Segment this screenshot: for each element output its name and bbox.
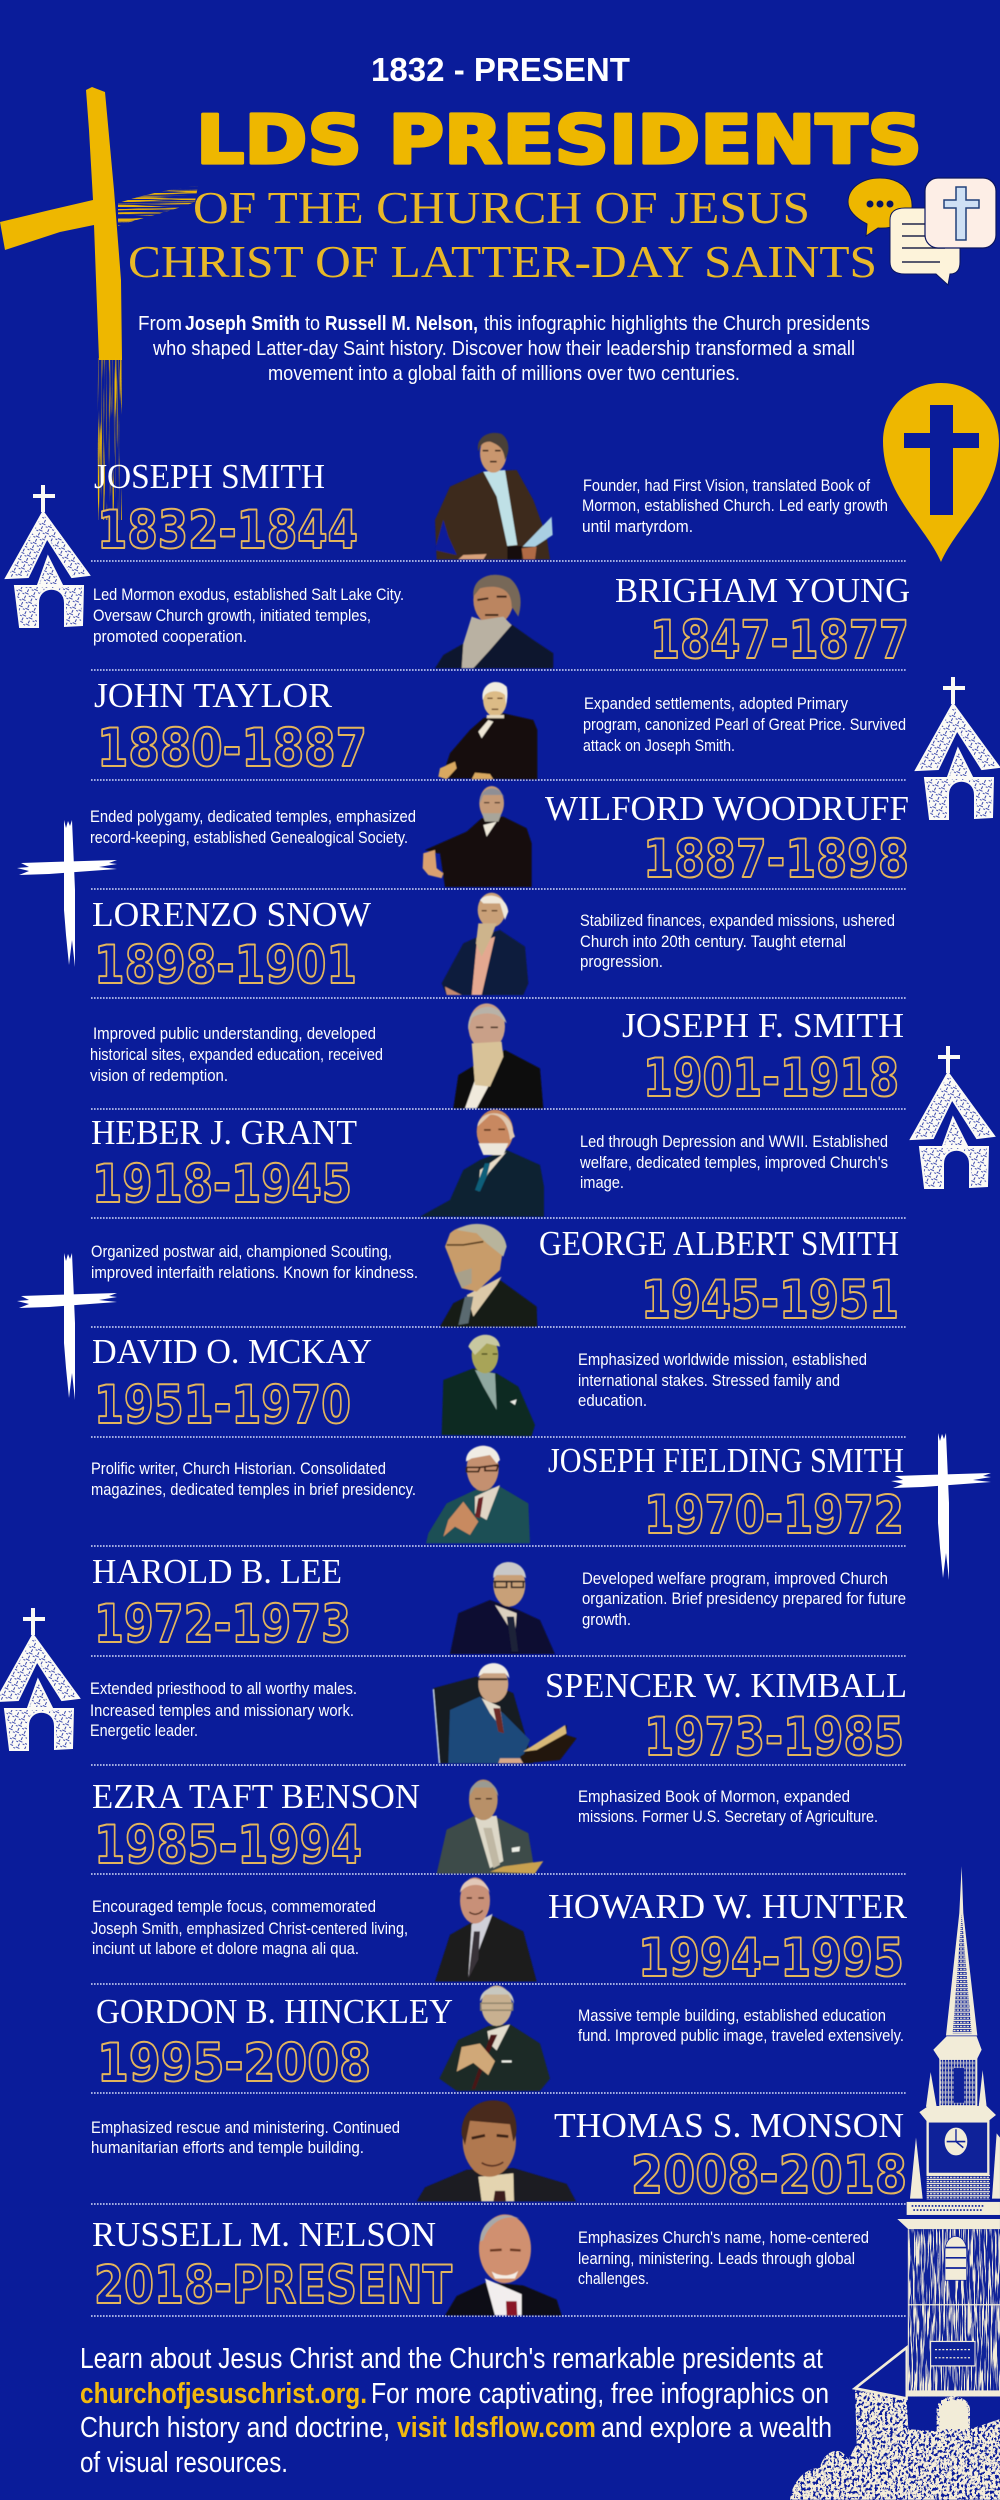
description: vision of redemption. [90,1066,228,1085]
name: HOWARD W. HUNTER [548,1887,908,1926]
intro text: movement into a global faith of millions over two centuries. [268,363,740,385]
description: Extended priesthood to all worthy males. [90,1679,357,1698]
dates: 1901-1918 [643,1048,899,1109]
footer call to action: Church history and doctrine, [80,2412,390,2444]
portrait [453,1003,543,1108]
description [578,2228,869,2288]
icon: church right 1 [916,677,999,819]
description: growth. [582,1610,631,1629]
description [578,1350,867,1410]
description: Led through Depression and WWII. Established [580,1132,888,1151]
row: Lorenzo Snow [92,893,895,996]
portrait [435,575,553,668]
description: magazines, dedicated temples in brief presidency. [91,1480,416,1499]
portrait [437,1779,543,1873]
description: attack on Joseph Smith. [583,736,735,755]
name: JOSEPH F. SMITH [622,1006,904,1045]
intro text: Joseph Smith [185,313,300,335]
portrait [423,786,532,887]
description: Stabilized finances, expanded missions, ushered [580,911,895,930]
row: Brigham Young [93,571,910,671]
name: RUSSELL M. NELSON [92,2215,436,2254]
description [90,1679,357,1740]
dates: 1985-1994 [94,1815,362,1876]
description: Led Mormon exodus, established Salt Lake City. [93,585,404,604]
intro text: to [305,313,320,335]
portrait [445,2214,562,2315]
name: EZRA TAFT BENSON [92,1777,420,1816]
row: Heber J. Grant [91,1110,888,1217]
portrait [442,1335,535,1436]
name: THOMAS S. MONSON [554,2106,904,2145]
description: Emphasized rescue and ministering. Continued [91,2118,400,2137]
dates: 1973-1985 [644,1707,904,1768]
description: challenges. [578,2269,649,2288]
intro text: Russell M. Nelson, [325,313,478,335]
subtitle: CHRIST OF LATTER-DAY SAINTS [128,236,877,287]
description: improved interfaith relations. Known for kindness. [91,1263,418,1282]
description: until martyrdom. [582,517,693,536]
description [91,1459,416,1499]
intro text [138,313,870,385]
description: humanitarian efforts and temple building. [91,2138,364,2157]
row: Gordon B. Hinckley [96,1985,904,2094]
portrait [417,2100,576,2201]
description: Joseph Smith, emphasized Christ-centered living, [91,1919,408,1938]
dates: 1995-2008 [97,2033,371,2094]
name: JOSEPH SMITH [94,457,325,496]
description: Emphasized Book of Mormon, expanded [578,1787,850,1806]
footer call to action: churchofjesuschrist.org. [80,2378,367,2410]
row: David O. McKay [92,1332,867,1436]
subtitle [128,182,877,287]
name: LORENZO SNOW [92,895,371,934]
dates: 2008-2018 [631,2145,907,2206]
name: GEORGE ALBERT SMITH [539,1224,899,1263]
icon: speech bubbles with cross [848,178,996,285]
description: Ended polygamy, dedicated temples, emphasized [90,807,416,826]
description: fund. Improved public image, traveled extensively. [578,2026,904,2045]
description [582,476,888,536]
portrait [439,1985,550,2091]
row: Joseph F. Smith [90,1003,904,1109]
portrait [438,682,537,779]
row: Wilford Woodruff [90,786,909,890]
description: historical sites, expanded education, received [90,1045,383,1064]
footer call to action: of visual resources. [80,2447,288,2479]
dates: 1880-1887 [97,718,367,779]
portrait [433,1663,577,1763]
description: Increased temples and missionary work. [90,1701,354,1720]
portrait [442,893,528,995]
description: progression. [580,952,663,971]
dates: 1945-1951 [641,1270,899,1331]
description: welfare, dedicated temples, improved Church's [579,1153,888,1172]
description: Energetic leader. [90,1721,198,1740]
dates: 1887-1898 [643,829,909,890]
heading: date range: 1832 - PRESENT [371,51,630,88]
description [93,585,404,646]
dates: 2018-PRESENT [94,2255,452,2316]
row: Ezra Taft Benson [92,1777,878,1876]
portrait [440,1224,537,1327]
description [91,1242,418,1282]
description [578,1787,878,1826]
description: Emphasizes Church's name, home-centered [578,2228,869,2247]
name: GORDON B. HINCKLEY [96,1992,453,2031]
dates: 1847-1877 [650,610,909,671]
dates: 1951-1970 [94,1375,351,1436]
description: program, canonized Pearl of Great Price. Survived [583,715,906,734]
name: JOHN TAYLOR [94,676,333,715]
description [90,807,416,847]
footer call to action: For more captivating, free infographics on [371,2378,829,2410]
row: Harold B. Lee [92,1552,906,1655]
description: Expanded settlements, adopted Primary [584,694,848,713]
row: Joseph Smith [94,433,888,561]
portrait [420,1110,544,1217]
icon: church steeple with trees [790,1866,1000,2500]
description: promoted cooperation. [93,627,247,646]
name: DAVID O. MCKAY [92,1332,372,1371]
description: Oversaw Church growth, initiated temples, [93,606,371,625]
footer call to action: and explore a wealth [601,2412,832,2444]
intro text: From [138,313,182,335]
description: Church into 20th century. Taught eternal [580,932,846,951]
dates: 1972-1973 [94,1594,351,1655]
icon: church left 2 [0,1608,79,1750]
subtitle: OF THE CHURCH OF JESUS [193,182,810,233]
description: Encouraged temple focus, commemorated [92,1897,376,1916]
dates: 1994-1995 [638,1928,904,1989]
dates: 1918-1945 [92,1154,352,1215]
title: LDS Presidents: LDS PRESIDENTS [196,101,922,179]
row: Russell M. Nelson [92,2214,869,2316]
dates: 1832-1844 [97,500,358,561]
description [582,1569,906,1629]
footer call to action: visit ldsflow.com [397,2412,596,2444]
row: Joseph Fielding Smith [91,1441,904,1546]
description: international stakes. Stressed family and [578,1371,840,1390]
description [91,2118,400,2157]
description: Organized postwar aid, championed Scouting, [91,1242,392,1261]
description: Founder, had First Vision, translated Book of [583,476,870,495]
description: learning, ministering. Leads through global [578,2249,855,2268]
row: George Albert Smith [91,1224,899,1331]
description: inciunt ut labore et dolore magna ali qua. [92,1939,359,1958]
description: Improved public understanding, developed [93,1024,376,1043]
description: Developed welfare program, improved Church [582,1569,888,1588]
description: image. [580,1173,624,1192]
icon: church right 2 [911,1046,994,1188]
icon: map pin with cross [883,383,999,562]
description: Emphasized worldwide mission, established [578,1350,867,1369]
dates: 1970-1972 [644,1485,904,1546]
footer call to action: Learn about Jesus Christ and the Church's remarkable presidents at [80,2343,823,2375]
row: John Taylor [94,676,906,779]
description [578,2006,904,2045]
portrait [426,1446,530,1543]
description [579,1132,888,1192]
description: Prolific writer, Church Historian. Consolidated [91,1459,386,1478]
description: record-keeping, established Genealogical Society. [90,828,408,847]
description: organization. Brief presidency prepared for future [582,1589,906,1608]
dividers [91,561,906,2316]
row: Spencer W. Kimball [90,1663,907,1768]
description: missions. Former U.S. Secretary of Agriculture. [578,1807,878,1826]
portrait [435,1877,537,1981]
icon: yellow brush cross [0,87,198,520]
icon: church left 1 [6,485,89,627]
portrait [450,1562,555,1654]
footer call to action [80,2343,832,2479]
description [580,911,895,971]
name: SPENCER W. KIMBALL [545,1666,907,1705]
name: BRIGHAM YOUNG [615,571,910,610]
description [90,1024,383,1085]
name: HEBER J. GRANT [91,1113,357,1152]
dates: 1898-1901 [94,935,357,996]
description [583,694,906,755]
description: Mormon, established Church. Led early growth [582,496,888,515]
portrait [435,433,553,559]
name: HAROLD B. LEE [92,1552,342,1591]
intro text: who shaped Latter-day Saint history. Discover how their leadership transformed a small [152,338,855,360]
name: JOSEPH FIELDING SMITH [548,1441,904,1480]
icon: white cross 3 [891,1433,991,1580]
description: education. [578,1391,647,1410]
row: Thomas S. Monson [91,2100,907,2206]
row: Howard W. Hunter [91,1877,908,1989]
intro text: this infographic highlights the Church presidents [484,313,870,335]
icon: white cross 1 [17,820,117,967]
name: WILFORD WOODRUFF [545,789,909,828]
description: Massive temple building, established education [578,2006,886,2025]
icon: white cross 2 [17,1253,117,1400]
description [91,1897,408,1958]
